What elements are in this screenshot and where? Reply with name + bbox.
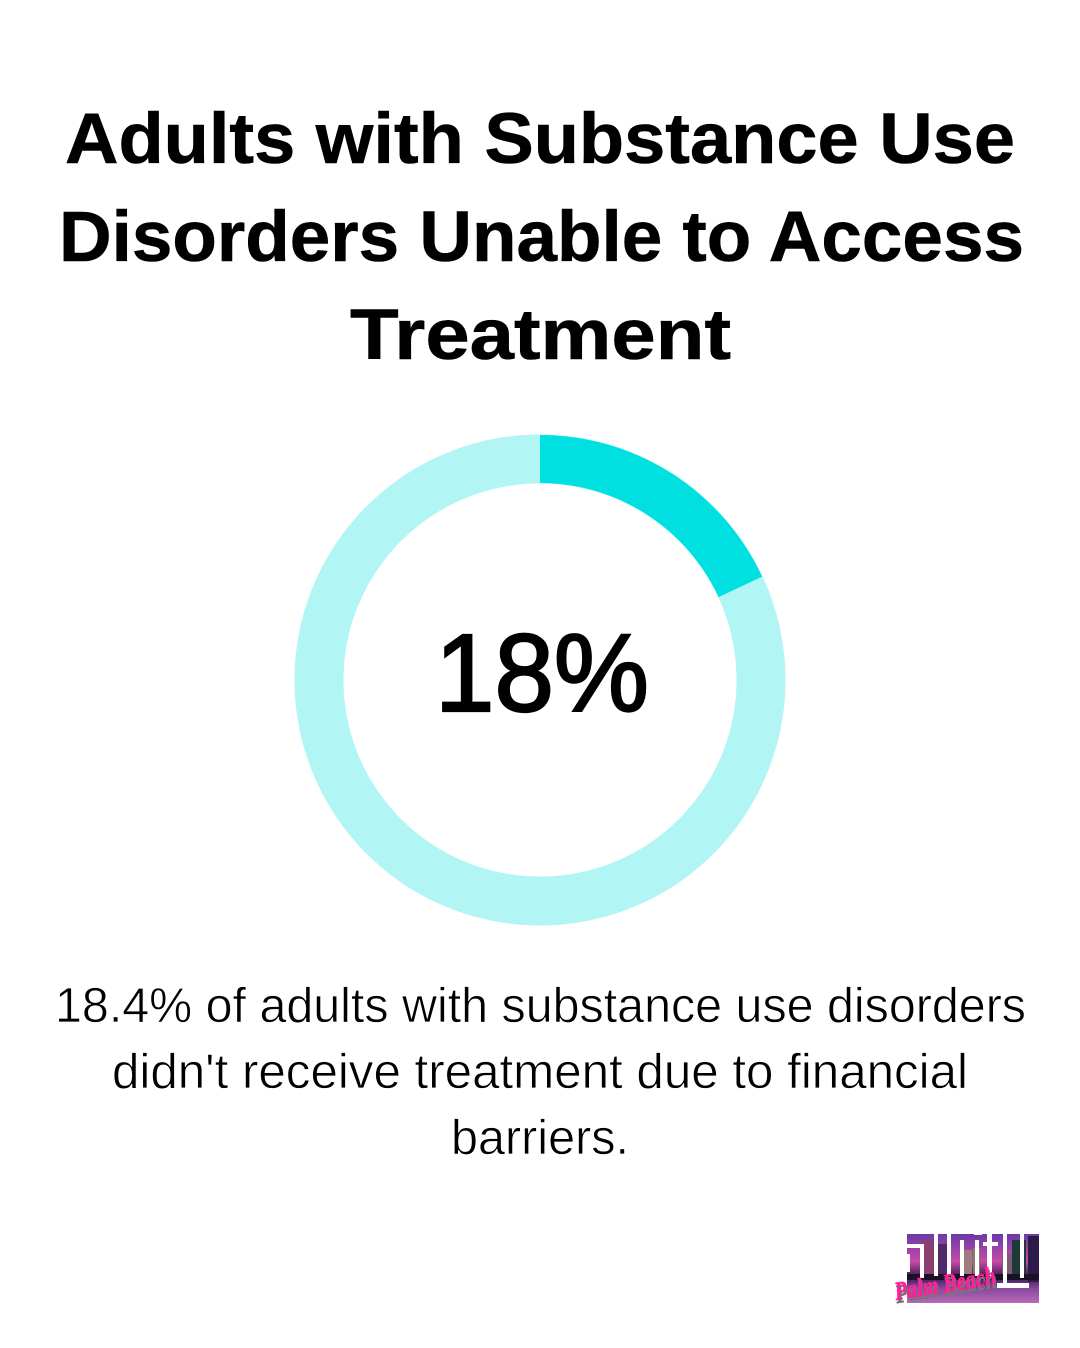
logo: Amity Palm Beach [892, 1229, 1039, 1309]
description text: didn't receive treatment due to financial [112, 1045, 968, 1099]
description text: 18.4% of adults with substance use disorders [55, 979, 1026, 1033]
logo white letterforms [907, 1229, 1029, 1288]
donut chart: 18% [319, 435, 762, 901]
description text [55, 979, 1026, 1165]
logo script shadow: Palm Beach [893, 1264, 999, 1309]
donut highlighted segment [540, 435, 762, 597]
title: Disorders Unable to Access [59, 198, 1024, 277]
logo city image [907, 1234, 1039, 1303]
title [59, 100, 1024, 375]
title: Treatment [350, 296, 731, 375]
description text: barriers. [451, 1111, 629, 1165]
title: Adults with Substance Use [65, 100, 1015, 179]
donut track [319, 459, 761, 901]
logo script text: Palm Beach [892, 1261, 998, 1306]
donut value: 18% [435, 612, 649, 735]
